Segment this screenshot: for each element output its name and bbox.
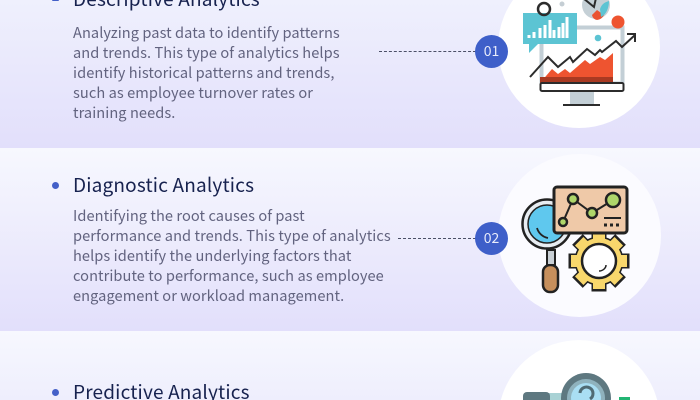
bullet 3 xyxy=(52,389,59,396)
icon: magnifier, chart and gear xyxy=(521,186,630,294)
badge 02: 02 xyxy=(484,228,499,248)
bullet 1 xyxy=(52,0,59,1)
text: diagnostic description: helps identify the underlying factors that xyxy=(73,245,351,266)
text: descriptive description: identify historical patterns and trends, xyxy=(73,62,334,83)
text: descriptive description: and trends. This type of analytics helps xyxy=(73,42,340,63)
connector 02 xyxy=(398,238,476,239)
text: descriptive description: training needs. xyxy=(73,102,175,123)
badge 01: 01 xyxy=(484,41,499,61)
text: diagnostic description: engagement or workload management. xyxy=(73,285,344,306)
badge 01 xyxy=(475,35,508,68)
badge 02 xyxy=(475,222,508,255)
text: descriptive description: Analyzing past data to identify patterns xyxy=(73,22,340,43)
text: descriptive description: such as employee turnover rates or xyxy=(73,82,313,103)
text: diagnostic description: Identifying the root causes of past xyxy=(73,205,305,226)
icon circle 2 xyxy=(498,154,661,317)
panel: descriptive analytics xyxy=(0,0,700,148)
icon: predictive magnifier xyxy=(523,373,630,400)
panel: predictive analytics xyxy=(0,331,700,400)
connector 01 xyxy=(379,51,476,52)
heading: diagnostic analytics: Diagnostic Analytics xyxy=(73,171,254,198)
panel: diagnostic analytics xyxy=(0,148,700,331)
text: diagnostic description xyxy=(73,205,391,306)
icon circle 1 xyxy=(499,0,660,128)
bullet 2 xyxy=(52,182,59,189)
icon circle 3 xyxy=(501,340,657,400)
text: descriptive description xyxy=(73,22,340,123)
icon: analytics monitor xyxy=(523,0,636,106)
text: diagnostic description: contribute to performance, such as employee xyxy=(73,265,384,286)
text: diagnostic description: performance and trends. This type of analytics xyxy=(73,225,391,246)
